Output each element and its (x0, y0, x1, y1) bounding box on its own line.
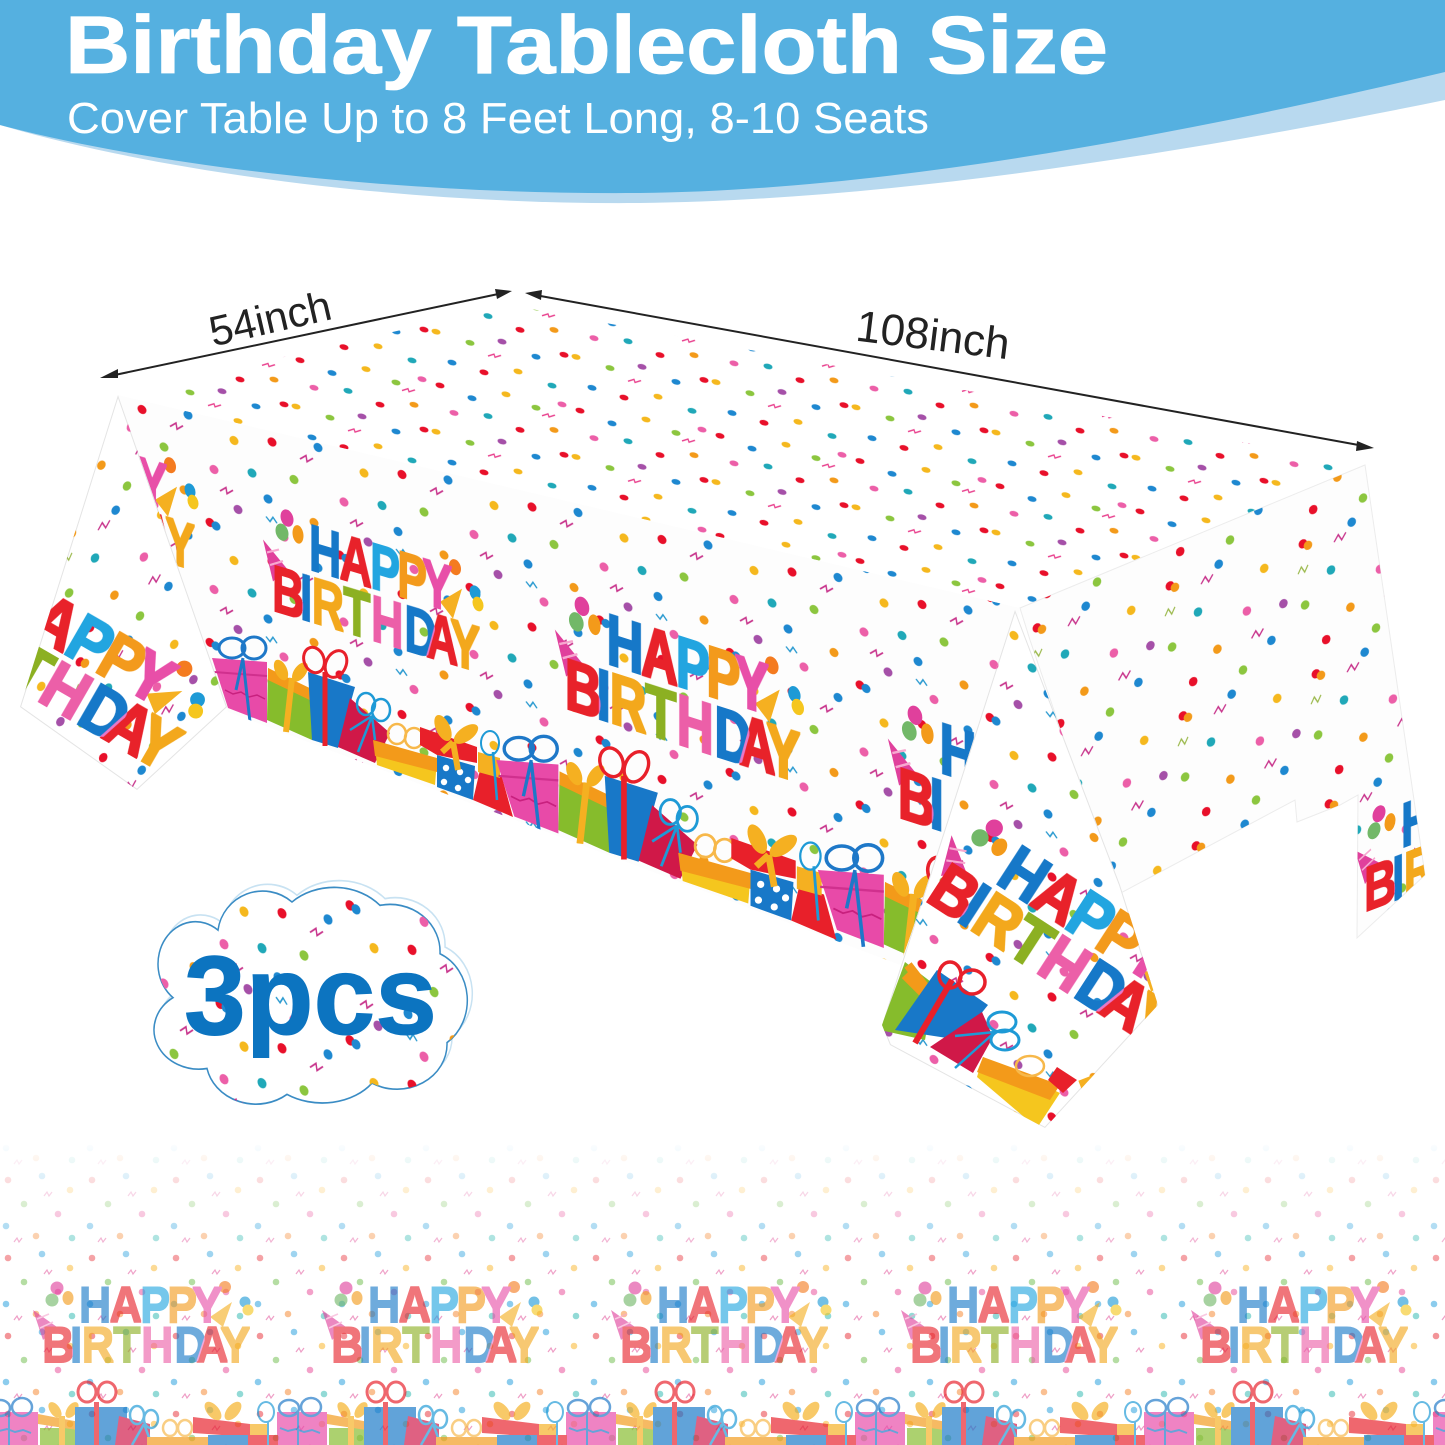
faded print 3: BIRTHDAY (620, 1318, 828, 1374)
faded print 2: HAPPY (368, 1278, 511, 1334)
happy birthday print 1: HAPPY (309, 512, 452, 627)
faded print 5: BIRTHDAY (1200, 1318, 1408, 1374)
happy birthday print at fold (139, 456, 198, 568)
left corner drop (0, 395, 227, 790)
faded print 3 (611, 1281, 832, 1363)
faded print 4: BIRTHDAY (910, 1318, 1118, 1374)
dimension: length 108 inch: 108inch (853, 302, 1012, 369)
tablecloth (0, 305, 1445, 1128)
title: Birthday Tablecloth Size (65, 0, 1108, 91)
table top surface (118, 305, 1365, 608)
happy birthday print 2: HAPPY (607, 599, 769, 731)
front corner drop (882, 610, 1158, 1128)
happy birthday print at fold: HAPPY (24, 410, 167, 525)
dimension: length 108 inch (525, 290, 1374, 451)
faded print 1: HAPPY (79, 1278, 222, 1334)
happy birthday print on front corner: HAPPY (986, 833, 1186, 998)
header banner (0, 0, 1445, 203)
cloud badge: 3pcs (154, 881, 472, 1104)
happy birthday print 3 (888, 706, 974, 832)
right edge partial lettering: H (1401, 780, 1433, 861)
faded print 3: HAPPY (657, 1278, 800, 1334)
happy birthday print 3: BI (898, 752, 944, 848)
gifts on front corner (880, 962, 1098, 1128)
dimension: width 54 inch (100, 282, 512, 378)
front side of cloth (137, 404, 1020, 960)
faded print 1 (33, 1281, 254, 1363)
happy birthday print 1: BIRTHDAY (272, 552, 480, 687)
faded print 5 (1191, 1281, 1412, 1363)
right side of cloth (1020, 465, 1445, 938)
happy birthday print on front corner (926, 820, 1157, 1035)
right edge partial lettering (1358, 800, 1425, 912)
right edge partial lettering: BIR (1364, 829, 1436, 925)
happy birthday print 2 (554, 596, 804, 780)
faded print 4 (901, 1281, 1122, 1363)
happy birthday print 2: BIRTHDAY (565, 643, 800, 799)
faded print 2 (322, 1281, 542, 1363)
gift strip (0, 1382, 1445, 1445)
faded print 4: HAPPY (947, 1278, 1090, 1334)
faded pattern strip (0, 1140, 1445, 1445)
faded print 5: HAPPY (1237, 1278, 1380, 1334)
subtitle: Cover Table Up to 8 Feet Long, 8-10 Seats (67, 94, 929, 143)
pieces count: 3pcs (184, 933, 437, 1058)
gift band (212, 637, 1179, 1061)
happy birthday print 1 (263, 509, 484, 670)
happy birthday print 3: H (940, 708, 976, 800)
dimension: width 54 inch: 54inch (205, 282, 336, 355)
happy birthday print on front corner: BIRTHDAY (916, 850, 1188, 1063)
faded print 2: BIRTHDAY (331, 1318, 539, 1374)
faded print 1: BIRTHDAY (42, 1318, 250, 1374)
